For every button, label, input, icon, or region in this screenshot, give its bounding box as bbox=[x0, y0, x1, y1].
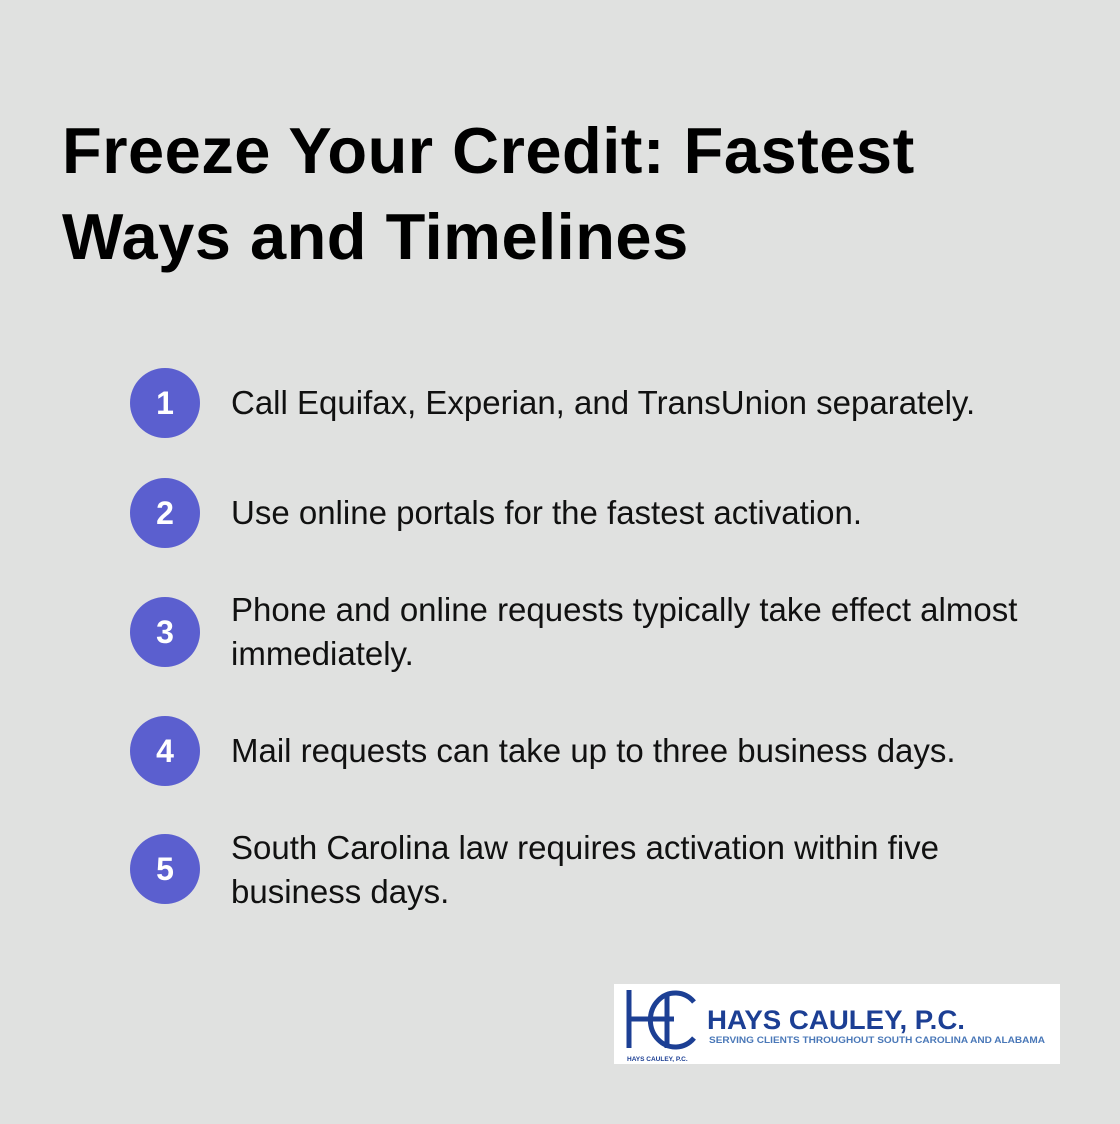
step 5: 5 bbox=[156, 851, 174, 887]
step 3 bbox=[130, 591, 1018, 672]
step 2: Use online portals for the fastest activation. bbox=[231, 494, 862, 531]
step 1: Call Equifax, Experian, and TransUnion separately. bbox=[231, 384, 975, 421]
step 5 bbox=[130, 829, 939, 910]
title: Ways and Timelines bbox=[62, 200, 689, 273]
step 3: immediately. bbox=[231, 635, 414, 672]
step 1 bbox=[130, 368, 975, 438]
step 4: Mail requests can take up to three business days. bbox=[231, 732, 956, 769]
logo: HAYS CAULEY, P.C. bbox=[627, 1056, 688, 1063]
logo bbox=[614, 984, 1060, 1064]
step 2: 2 bbox=[156, 495, 174, 531]
step 3: 3 bbox=[156, 614, 174, 650]
title: Freeze Your Credit: Fastest bbox=[62, 114, 915, 187]
step 3: Phone and online requests typically take effect almost bbox=[231, 591, 1017, 628]
title bbox=[62, 114, 915, 273]
step 4: 4 bbox=[156, 733, 174, 769]
logo: SERVING CLIENTS THROUGHOUT SOUTH CAROLINA AND ALABAMA bbox=[709, 1035, 1045, 1046]
step 5: business days. bbox=[231, 873, 449, 910]
logo: HAYS CAULEY, P.C. bbox=[707, 1005, 965, 1035]
step 4 bbox=[130, 716, 956, 786]
step 2 bbox=[130, 478, 862, 548]
step 5: South Carolina law requires activation within five bbox=[231, 829, 939, 866]
step 1: 1 bbox=[156, 385, 174, 421]
